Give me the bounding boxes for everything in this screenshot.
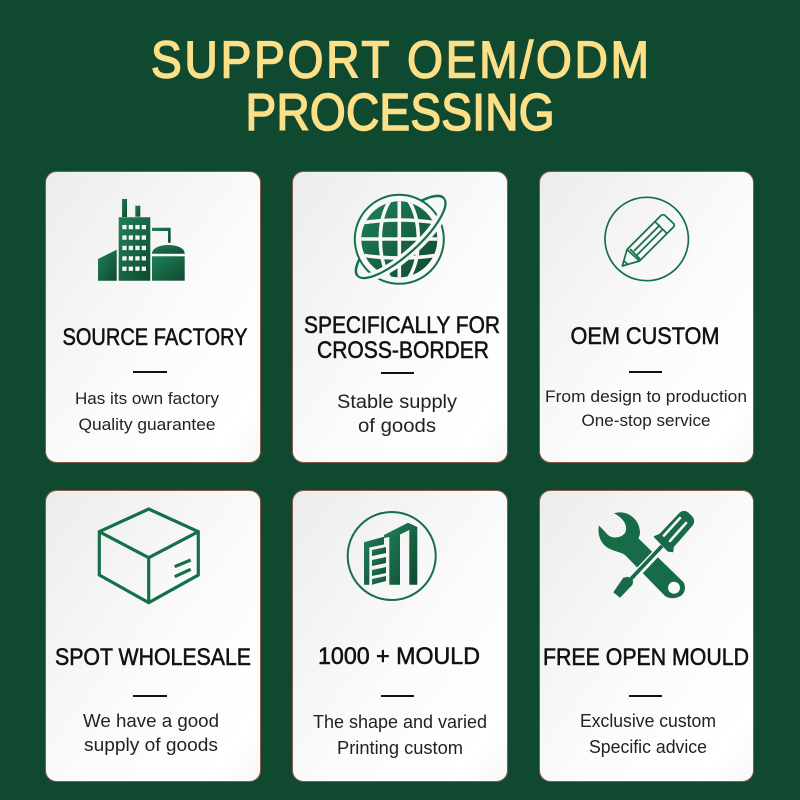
text bbox=[75, 389, 219, 434]
heading: SOURCE FACTORY bbox=[62, 324, 248, 351]
text: One-stop service bbox=[582, 411, 710, 430]
icon: pencil bbox=[605, 197, 688, 281]
text bbox=[83, 711, 219, 755]
text: The shape and varied bbox=[313, 712, 487, 732]
panel: free open mould bbox=[540, 490, 754, 782]
text: Stable supply bbox=[337, 392, 458, 413]
text bbox=[580, 711, 716, 757]
panel: spot wholesale bbox=[46, 490, 260, 782]
heading bbox=[304, 312, 500, 364]
panel: source factory bbox=[46, 172, 260, 462]
icon: box bbox=[99, 509, 198, 603]
panel: cross-border bbox=[292, 172, 508, 462]
heading: 1000 + MOULD bbox=[318, 643, 480, 670]
panel: 1000+ mould bbox=[292, 490, 508, 782]
text: We have a good bbox=[83, 711, 219, 731]
text: Exclusive custom bbox=[580, 711, 716, 731]
heading: SPECIFICALLY FOR bbox=[304, 312, 500, 339]
text: Has its own factory bbox=[75, 389, 219, 408]
text: Printing custom bbox=[337, 738, 463, 758]
icon: wrench and screwdriver bbox=[598, 512, 694, 598]
text: supply of goods bbox=[84, 735, 218, 755]
heading: OEM CUSTOM bbox=[570, 323, 720, 350]
panel: oem custom bbox=[540, 172, 754, 462]
title bbox=[151, 32, 649, 142]
title: SUPPORT OEM/ODM bbox=[151, 32, 649, 89]
icon: globe bbox=[354, 194, 447, 285]
heading: SPOT WHOLESALE bbox=[55, 644, 251, 671]
heading: CROSS-BORDER bbox=[317, 337, 489, 364]
text bbox=[545, 387, 747, 430]
text: of goods bbox=[358, 416, 436, 437]
icon: factory bbox=[98, 199, 185, 281]
title: PROCESSING bbox=[246, 85, 554, 142]
text: From design to production bbox=[545, 387, 747, 406]
text bbox=[337, 392, 458, 437]
heading: FREE OPEN MOULD bbox=[543, 644, 749, 671]
text bbox=[313, 712, 487, 758]
text: Specific advice bbox=[589, 737, 707, 757]
icon: buildings bbox=[348, 512, 436, 600]
text: Quality guarantee bbox=[78, 415, 216, 434]
